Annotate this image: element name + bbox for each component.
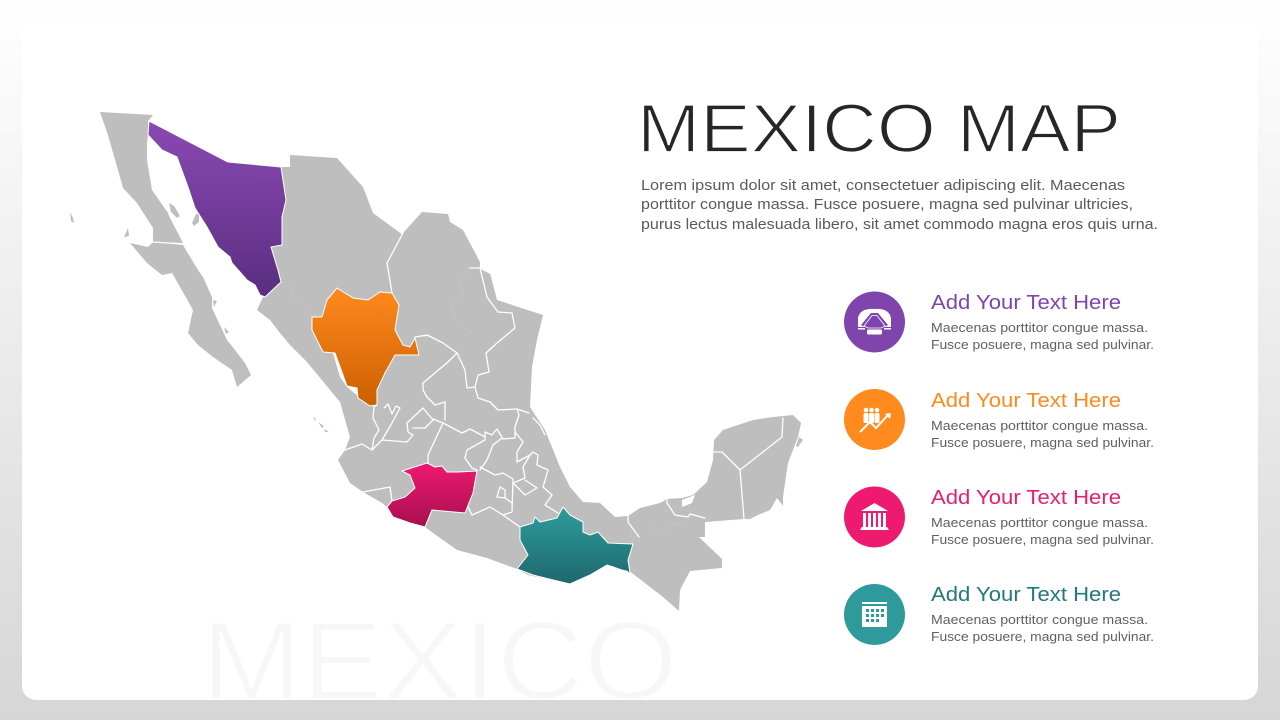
heading: Add Your Text Here	[931, 584, 1121, 606]
state boundaries	[153, 233, 783, 537]
region: Sonora (purple)	[148, 121, 286, 297]
description	[931, 612, 1154, 644]
heading: Add Your Text Here	[931, 487, 1121, 509]
icon: calendar	[844, 584, 905, 645]
icon: conference table	[844, 292, 905, 352]
lagoon details	[607, 495, 695, 573]
item 2: orange	[844, 389, 1154, 450]
heading: Add Your Text Here	[931, 292, 1121, 314]
region: Durango (orange)	[312, 288, 419, 406]
description	[931, 418, 1154, 450]
description: Maecenas porttitor congue massa.	[931, 320, 1148, 335]
description	[931, 515, 1154, 547]
heading: Add Your Text Here	[931, 390, 1121, 412]
description: Fusce posuere, magna sed pulvinar.	[931, 532, 1154, 547]
intro paragraph: Lorem ipsum dolor sit amet, consectetuer adipiscing elit. Maecenas	[641, 177, 1125, 194]
description: Fusce posuere, magna sed pulvinar.	[931, 435, 1154, 450]
map of Mexico	[70, 112, 803, 611]
description	[931, 320, 1154, 352]
description: Maecenas porttitor congue massa.	[931, 418, 1148, 433]
region: Michoacan (pink)	[387, 463, 477, 527]
description: Maecenas porttitor congue massa.	[931, 612, 1148, 627]
item 3: pink	[844, 486, 1154, 548]
watermark: MEXICO: MEXICO	[201, 599, 678, 720]
intro paragraph	[641, 177, 1158, 233]
intro paragraph: porttitor congue massa. Fusce posuere, magna sed pulvinar ultricies,	[641, 196, 1133, 213]
icon: people and growth arrow	[844, 389, 905, 450]
title: MEXICO MAP	[637, 90, 1121, 167]
description: Maecenas porttitor congue massa.	[931, 515, 1148, 530]
intro paragraph: purus lectus malesuada libero, sit amet commodo magna eros quis urna.	[641, 216, 1158, 233]
item 1: purple	[844, 292, 1154, 352]
item 4: teal	[844, 584, 1154, 645]
region: Oaxaca (teal)	[517, 507, 633, 584]
icon: bank building	[844, 486, 905, 548]
description: Fusce posuere, magna sed pulvinar.	[931, 337, 1154, 352]
state group: grey base regions	[70, 112, 803, 611]
description: Fusce posuere, magna sed pulvinar.	[931, 629, 1154, 644]
